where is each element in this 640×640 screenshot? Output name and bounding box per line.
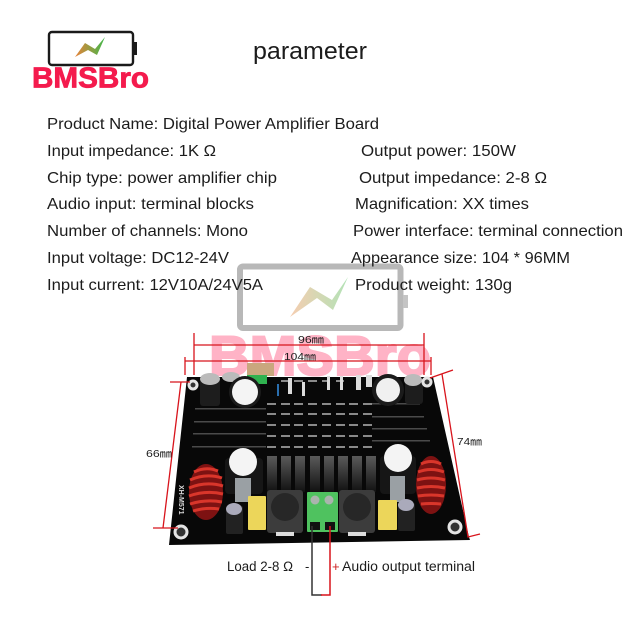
logo: BMSBro [32, 32, 149, 94]
capacitors middle [225, 444, 416, 502]
audio output label: Audio output terminal [342, 559, 475, 574]
watermark: BMSBro battery: BMSBro [209, 324, 431, 387]
parameter list: right column: Power interface: terminal connection [353, 223, 623, 240]
icon: battery with lightning bolt [49, 32, 137, 65]
central heatsink [267, 375, 376, 492]
parameter list: left column: Product Name: Digital Power Amplifier Board [47, 116, 379, 133]
board outline [169, 377, 470, 545]
green output terminal [307, 492, 338, 532]
parameter list: right column [351, 143, 623, 294]
parameter list: left column: Input impedance: 1K Ω [47, 143, 216, 160]
parameter list: right column: Output impedance: 2-8 Ω [359, 170, 547, 187]
dimension label: 74 mm: 74㎜ [457, 436, 483, 448]
parameter list: right column: Output power: 150W [361, 143, 517, 160]
dimension label: 66 mm: 66㎜ [146, 448, 173, 460]
mounting holes [175, 378, 461, 538]
board silkscreen label: XH-M571 [177, 485, 184, 515]
capacitors top [200, 372, 423, 408]
side heatsink rails [192, 403, 430, 448]
parameter list: left column: Input voltage: DC12-24V [47, 250, 229, 267]
amplifier board [169, 363, 470, 545]
yellow capacitors [248, 496, 397, 530]
load label: Load 2-8 Ω [227, 559, 293, 574]
watermark: BMSBro battery [209, 266, 431, 387]
parameter list: left column [47, 116, 379, 294]
parameter list: right column: Product weight: 130g [355, 277, 512, 294]
plus sign: + [332, 559, 340, 574]
logo wordmark: BMSBro [32, 62, 149, 94]
parameter list: left column: Number of channels: Mono [47, 223, 248, 240]
dimension lines [153, 333, 480, 537]
toroid coil left [189, 464, 223, 520]
output wires [312, 526, 330, 595]
inductors [267, 490, 375, 536]
parameter list: right column: Magnification: XX times [355, 196, 529, 213]
minus sign: - [305, 559, 309, 574]
parameter list: right column: Appearance size: 104 * 96MM [351, 250, 570, 267]
dimension label: 104 mm: 104㎜ [284, 351, 317, 363]
green connector top [247, 363, 274, 384]
dimension label: 96 mm: 96㎜ [298, 334, 325, 346]
title: parameter [253, 38, 367, 65]
parameter list: left column: Audio input: terminal blocks [47, 196, 254, 213]
parameter list: left column: Chip type: power amplifier chip [47, 170, 277, 187]
parameter list: left column: Input current: 12V10A/24V5A [47, 277, 263, 294]
small capacitors [226, 499, 415, 534]
toroid coil right [416, 456, 446, 514]
